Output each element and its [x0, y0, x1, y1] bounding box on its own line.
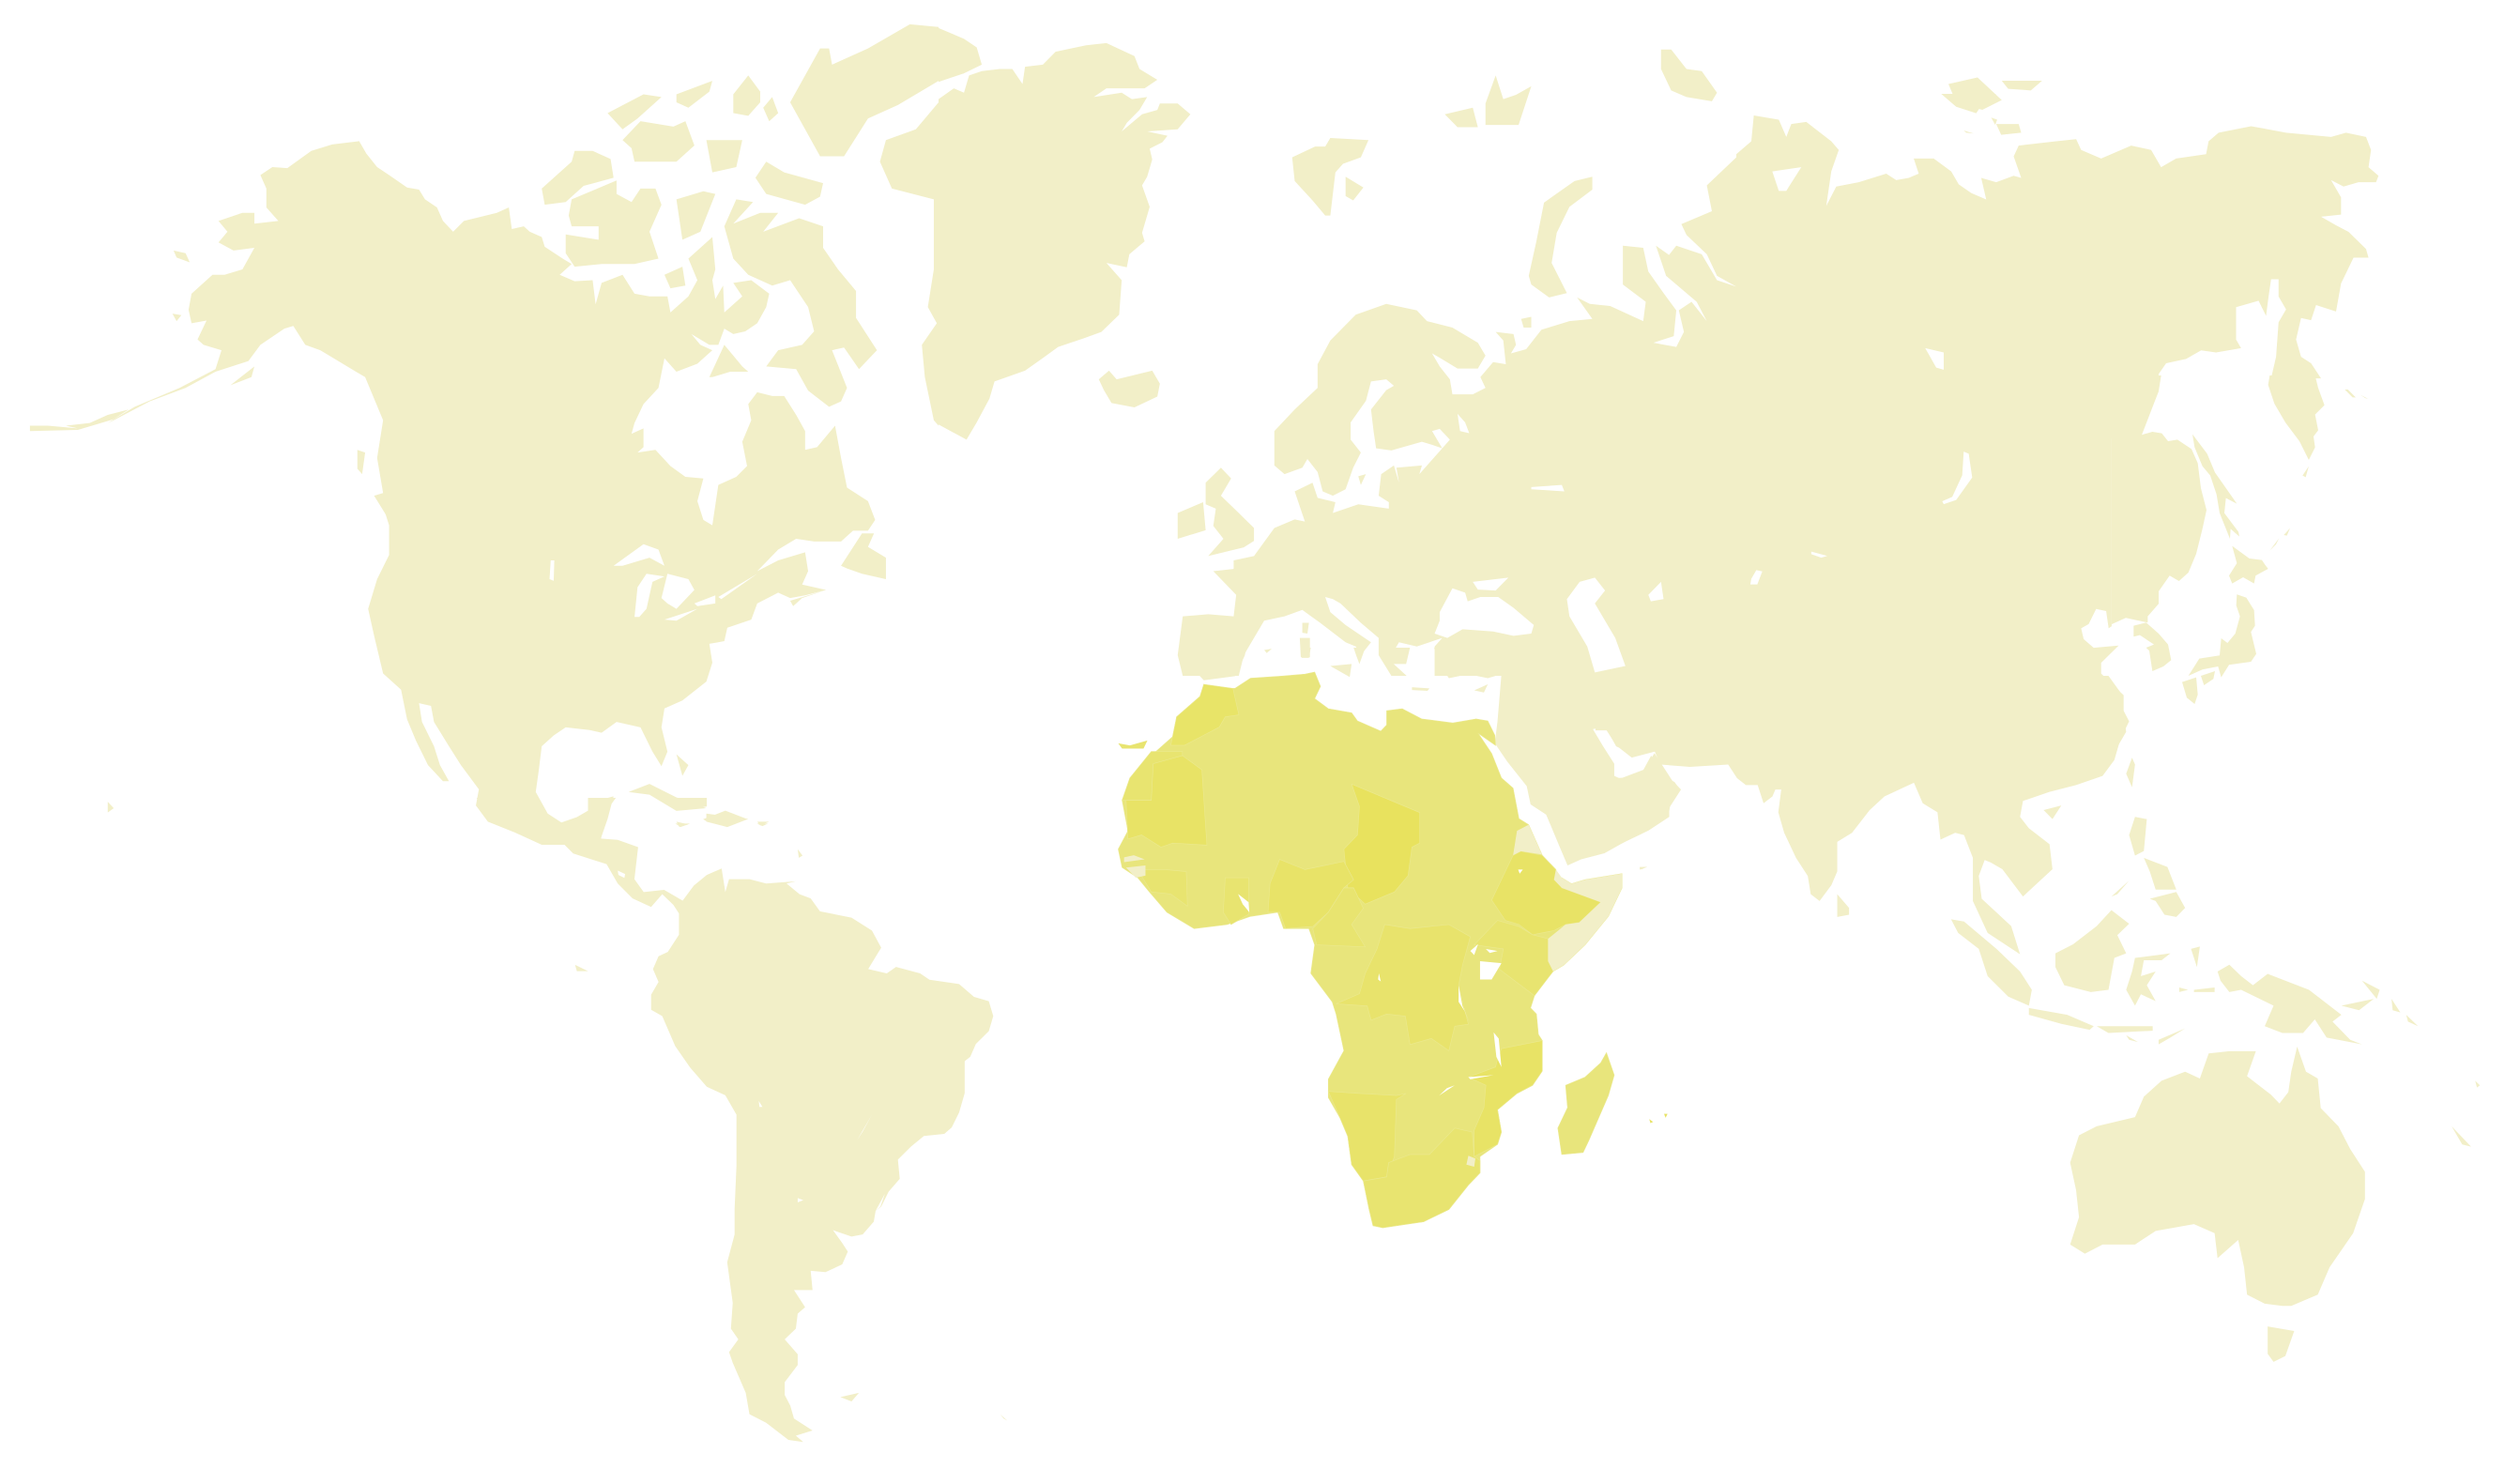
lakes: Africa	[1238, 869, 1523, 1095]
landmass: North America and Arctic Canada	[30, 24, 939, 845]
Kenya	[1474, 921, 1553, 996]
lakes and inland seas: Europe and Central Asia	[1432, 414, 1663, 672]
region: Africa (highlighted)	[1118, 672, 1668, 1228]
Nigeria	[1268, 860, 1353, 928]
Canary Islands	[1118, 741, 1148, 749]
Ethiopia	[1491, 851, 1600, 935]
landmass: Siberia, China and Far East	[1736, 94, 2378, 770]
landmass: New Siberian islands	[1948, 78, 2042, 110]
lakes and inland seas: Americas	[550, 467, 757, 620]
Swaziland (pale)	[1466, 1155, 1475, 1167]
DR Congo	[1336, 925, 1471, 1050]
Mauritania and Western Sahara	[1126, 756, 1207, 848]
landmass: Greenland west coast	[880, 102, 939, 425]
landmass: Sakhalin, Japan, Korea and Kamchatka	[2112, 375, 2368, 704]
Chad	[1344, 784, 1420, 904]
Namibia	[1328, 1092, 1406, 1181]
Madagascar	[1558, 1053, 1614, 1155]
Somalia (pale)	[1548, 869, 1622, 972]
Eritrea (pale)	[1513, 825, 1556, 869]
Cameroon	[1313, 888, 1366, 947]
Africa base outline	[1118, 672, 1622, 1226]
Gambia and Guinea-Bissau (pale)	[1124, 855, 1145, 863]
landmass: Central and South America	[477, 798, 1007, 1442]
landmass: Turkey, Middle East and Arabia	[1181, 648, 1689, 869]
lakes: East Asia	[1750, 167, 1972, 585]
lakes: South America	[618, 871, 885, 1211]
landmass: South and Southeast Asia, Oceania	[1596, 676, 2480, 1362]
Mauritius and Reunion	[1649, 1119, 1653, 1124]
Morocco	[1170, 684, 1239, 745]
South Africa	[1364, 1128, 1480, 1228]
Guinea and Ghana	[1138, 869, 1187, 906]
landmass: Greenland, Iceland, Europe and western Russia	[939, 28, 1736, 676]
Mozambique	[1468, 1041, 1542, 1156]
